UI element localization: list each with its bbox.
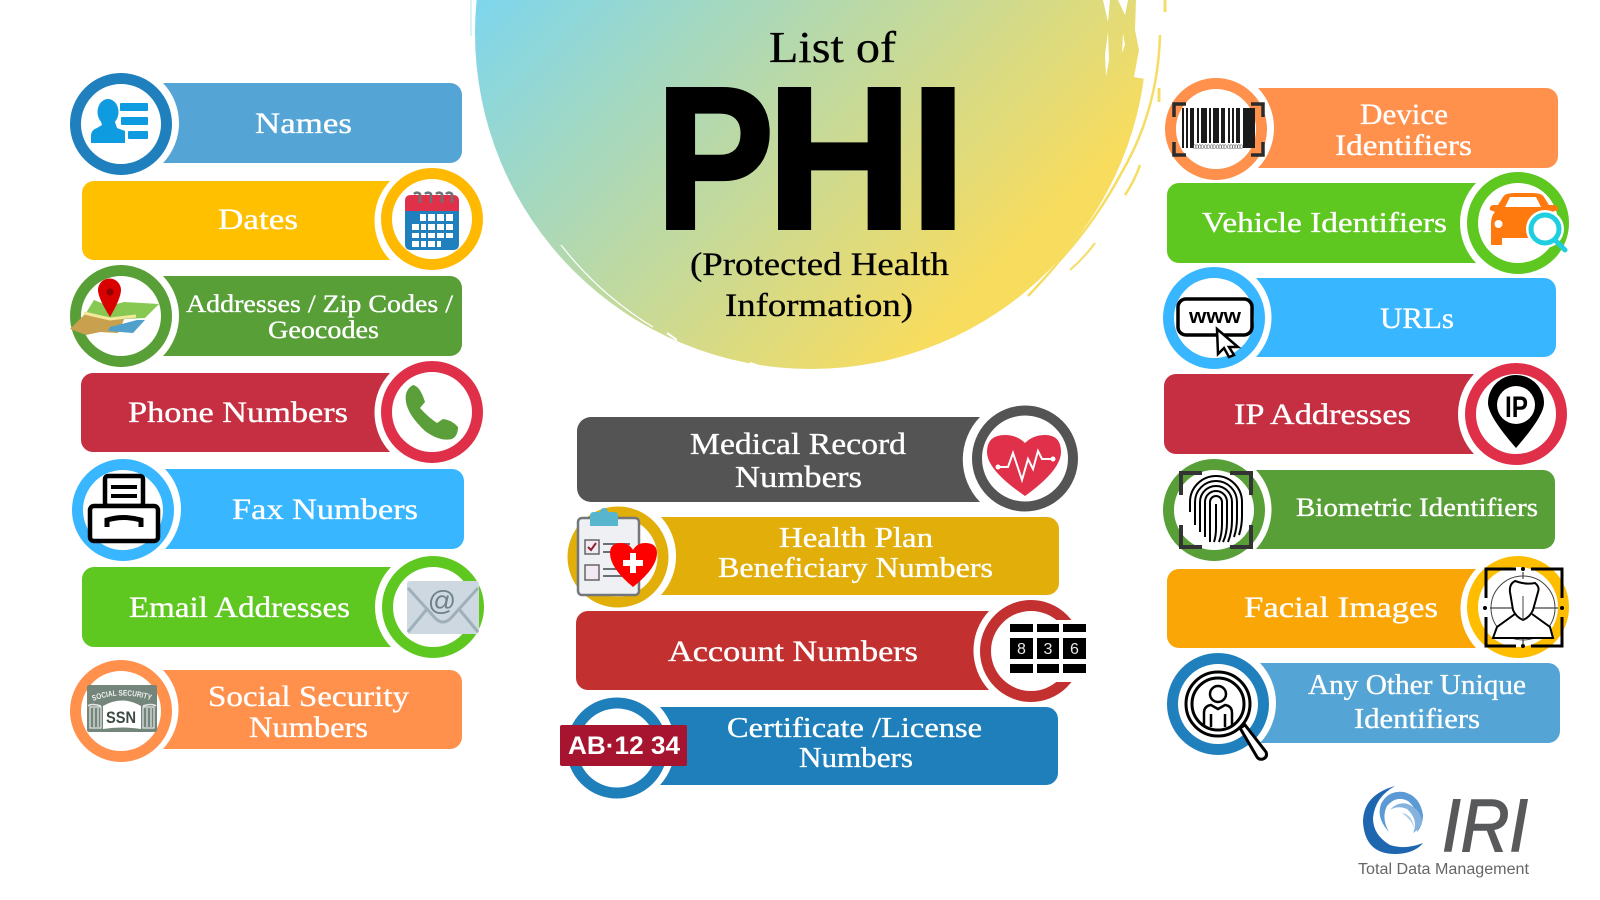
logo swirl [1363,786,1423,854]
bar: Device [1258,88,1558,168]
icon: www cursor [1178,299,1252,357]
bar: Dates [82,181,390,260]
title: PHI: H [766,45,912,271]
icon: number lock 836 [1010,624,1086,673]
item: Biometric Identifiers [1168,464,1555,556]
bar: Any Other [1260,663,1560,743]
bar: Names [163,83,462,163]
item: Fax Numbers: Fax Numbers [232,493,418,526]
item: Phone Numbers: Phone Numbers [128,396,348,429]
item: Social Security Numbers: Social Security [208,680,409,713]
icon: number lock 836: 8 [1017,641,1026,658]
icon: heart with ECG [987,435,1061,496]
item: Addresses: Addresses / Zip Codes / [186,291,453,318]
icon: clipboard with heart [578,508,657,595]
icon: phone handset [406,385,458,440]
item: Facial Images: Facial Images [1244,591,1438,624]
item: Addresses: Geocodes [268,317,379,344]
bar: Vehicle [1167,183,1476,263]
item: Email Addresses: Email Addresses [129,591,350,624]
item: Addresses [70,270,462,362]
bar: Addresses [163,276,462,356]
bar: Phone [81,373,390,452]
item: Medical Record Numbers: Medical Record [690,426,907,461]
item: Account Numbers [576,606,1096,696]
item: Vehicle Identifiers [1167,178,1565,268]
item: Social Security Numbers: Numbers [249,711,368,744]
title: PHI: P [656,45,774,271]
item: Vehicle Identifiers: Vehicle Identifiers [1202,207,1447,239]
item: Medical Record Numbers [577,410,1073,506]
bar: Facial [1167,569,1476,648]
item: Any Other Unique Identifiers: Identifiers [1354,703,1480,735]
item: Phone Numbers [81,366,478,458]
icon: SSN card: SOCIAL SECURITY [92,690,152,700]
icon: car with magnifier [1490,193,1565,250]
item: Biometric Identifiers: Biometric Identifiers [1296,493,1538,522]
subtitle: Protected Health Information [690,247,950,324]
brush-stroke gradient circle [471,0,1165,369]
logo tagline: Total Data Management [1358,861,1530,878]
bar: Health Plan [661,517,1059,595]
item: Health Plan Beneficiary Numbers: Beneficiary Numbers [718,552,993,584]
icon: magnifier with person [1186,672,1267,759]
item: IP Addresses [1164,368,1562,460]
icon: SSN card [87,685,157,732]
title: PHI: I [910,45,966,271]
bar: Email [82,567,391,647]
icon: fax machine [90,476,158,541]
icon: calendar [405,193,459,250]
icon: barcode [1174,104,1263,155]
icon: www cursor: www [1188,306,1241,328]
bar: Account [576,611,989,690]
title: List of: List of [769,23,896,72]
logo: IRI Total Data Management [1358,784,1530,878]
bar: URLs [1256,278,1556,357]
bar: Biometric [1256,470,1555,549]
icon: IP pin [1488,375,1544,448]
item: Device Identifiers: Identifiers [1335,129,1472,162]
item: Facial Images [1167,562,1564,652]
item: Device Identifiers [1170,84,1558,174]
logo wordmark: IRI [1442,784,1528,867]
item: Medical Record Numbers: Numbers [735,459,862,494]
icon: number lock 836: 6 [1070,641,1079,658]
item: Device Identifiers: Device [1360,98,1448,131]
item: Names: Names [255,107,352,140]
icon: license plate: AB·12 34 [568,732,680,760]
item: Account Numbers: Account Numbers [668,635,918,668]
bar: IP Addresses [1164,374,1474,454]
icon: license plate [560,725,687,766]
icon: envelope: @ [428,585,456,616]
subtitle: Protected Health Information: (Protected Health [690,247,950,283]
item: Health Plan Beneficiary Numbers [573,508,1059,602]
bar: Fax [165,469,464,549]
item: Certificate / License Numbers: Numbers [799,742,913,774]
item: Dates: Dates [218,203,298,236]
item: Any Other Unique Identifiers [1172,658,1560,759]
icon: SSN card: SSN [106,708,136,727]
item: Any Other Unique Identifiers: Any Other Unique [1308,669,1526,701]
item: Certificate / License Numbers: Certificate /License [727,712,982,744]
item: Names [76,78,462,170]
icon: map and pin [70,278,159,335]
bar: Medical Record [577,417,980,502]
item: URLs [1168,272,1556,364]
icon: person with lines [91,99,148,143]
item: Fax Numbers [78,464,464,556]
item: Health Plan Beneficiary Numbers: Health Plan [779,522,934,554]
subtitle: Protected Health Information: Information) [725,288,913,324]
icon: face scan [1483,567,1564,648]
icon: number lock 836: 3 [1044,641,1053,658]
item: Email Addresses [82,562,479,652]
item: Dates [82,174,478,264]
item: Social Security Numbers [70,660,462,762]
item: URLs: URLs [1380,302,1454,335]
bar: Social Security [163,670,462,749]
icon: fingerprint [1181,473,1251,547]
icon: IP pin: IP [1505,391,1528,424]
item: IP Addresses: IP Addresses [1234,398,1411,431]
item: Certificate / License Numbers [560,703,1058,793]
icon: envelope [407,581,479,634]
icon: barcode: 0000 00 00 0000 000000 [1193,145,1244,151]
bar: Certificate [660,707,1058,785]
